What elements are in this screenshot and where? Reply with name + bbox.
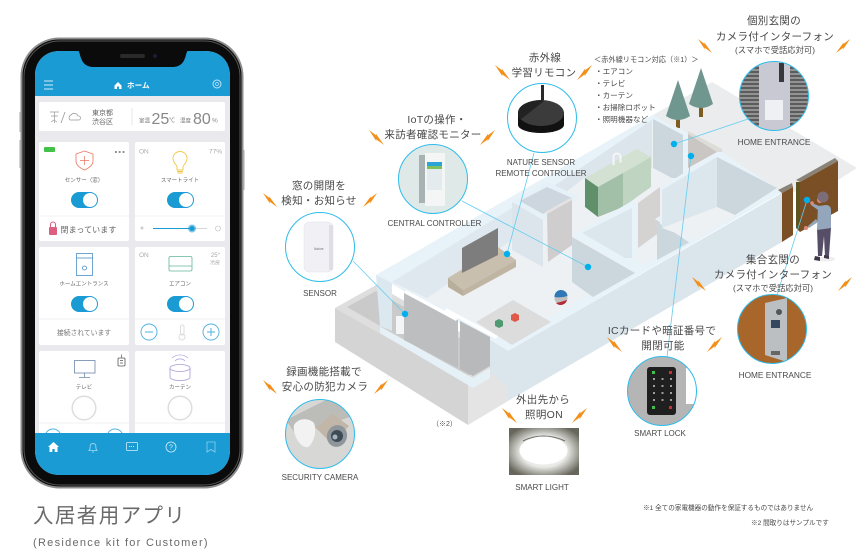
callout: smart light: 外出先から: [516, 394, 570, 406]
card: smart light: [135, 142, 225, 241]
weather card: 25: [152, 111, 169, 128]
tab bar: [35, 433, 230, 475]
callout: smart light: 照明ON: [525, 409, 563, 421]
card: air conditioner: ON: [139, 252, 149, 259]
callout: shared entrance intercom: カメラ付インターフォン: [714, 268, 832, 281]
window panels: [404, 290, 508, 387]
callout: individual entrance intercom: 個別玄関の: [747, 14, 801, 27]
callout: smart lock: SMART LOCK: [634, 429, 687, 438]
app header: [35, 51, 230, 96]
card: air conditioner: 25°: [211, 253, 221, 259]
weather card: %: [212, 118, 218, 124]
callout: window sensor: 窓の開閉を: [292, 180, 346, 192]
IR compatible device list: ・エアコン: [595, 67, 633, 76]
IR compatible device list: ＜赤外線リモコン対応（※1）＞: [594, 55, 699, 64]
callout: central controller: CENTRAL CONTROLLER: [388, 219, 482, 228]
kitchen counter: [585, 149, 651, 217]
callout: central controller: [369, 113, 495, 228]
card: air conditioner: [135, 247, 225, 345]
weather card: 室温: [139, 116, 151, 124]
card: smart light: スマートライト: [161, 177, 199, 184]
callout: individual entrance intercom: [698, 14, 850, 147]
weather card: 渋谷区: [92, 117, 113, 126]
callout: smart light: SMART LIGHT: [515, 483, 569, 492]
callout: smart lock: 開閉可能: [641, 339, 685, 352]
callout: IR remote: 赤外線: [529, 51, 561, 64]
callout: security camera: 安心の防犯カメラ: [282, 380, 368, 393]
IR compatible device list: ・テレビ: [595, 79, 625, 88]
callout: window sensor: [263, 180, 377, 298]
weather card: 80: [193, 111, 211, 128]
back wall: [392, 208, 512, 298]
IR compatible device list: ・カーテン: [595, 91, 633, 100]
card: sensor: 閉まっています: [60, 226, 116, 234]
callout: IR remote: REMOTE CONTROLLER: [495, 169, 587, 178]
callout: IR remote: 学習リモコン: [512, 66, 576, 79]
left pillar: [376, 275, 490, 388]
IR compatible device list: [594, 55, 699, 124]
upper room: [653, 119, 722, 178]
ball: [554, 290, 568, 305]
TV stand: [448, 247, 516, 296]
callout: shared entrance intercom: (スマホで受話応対可): [733, 283, 813, 293]
weather card: 東京都: [92, 108, 113, 117]
card: TV: [39, 351, 129, 433]
footnotes: ※1 全ての家電機器の動作を保証するものではありません: [643, 503, 814, 512]
callout: individual entrance intercom: HOME ENTRANCE: [738, 137, 811, 147]
card: home entrance: [39, 247, 129, 345]
callout: shared entrance intercom: 集合玄関の: [746, 253, 800, 266]
card: curtain: [135, 351, 225, 441]
card: home entrance: ホームエントランス: [59, 280, 109, 288]
IR compatible device list: ・お掃除ロボット: [595, 102, 656, 112]
connector lines and dots: [353, 119, 810, 357]
card: home entrance: 接続されています: [57, 328, 111, 337]
central room: [512, 182, 580, 267]
card: smart light: 77%: [209, 148, 222, 156]
app title: 入居者用アプリ: [33, 504, 186, 528]
TV: [462, 228, 498, 273]
card: smart light: ON: [139, 148, 149, 156]
weather card: 湿度: [180, 116, 192, 124]
callout: security camera: SECURITY CAMERA: [282, 473, 359, 482]
weather card: [39, 102, 225, 131]
isometric floor plan: [335, 68, 857, 425]
card: air conditioner: 冷房: [210, 260, 220, 266]
lower rooms: [572, 187, 696, 297]
footnote marker: （※2）: [432, 420, 457, 428]
phone screen: [35, 51, 230, 475]
notch: [78, 50, 188, 67]
balcony: [335, 285, 508, 425]
entrance gate: [778, 158, 838, 242]
callout: smart light: [502, 394, 587, 492]
footnotes: [643, 503, 829, 527]
card: sensor: センサー（窓）: [65, 176, 103, 184]
floor rug with blocks: [476, 300, 551, 345]
IR compatible device list: ・照明機器など: [595, 114, 649, 124]
large room: [660, 152, 782, 240]
callout: individual entrance intercom: (スマホで受話応対可): [735, 45, 815, 55]
footnotes: ※2 間取りはサンプルです: [751, 519, 829, 527]
phone: resident app: [20, 38, 244, 488]
callout: security camera: 録画機能搭載で: [286, 365, 362, 378]
callout: security camera: [263, 365, 388, 482]
card: air conditioner: エアコン: [169, 280, 191, 288]
callout: window sensor: 検知・お知らせ: [281, 194, 357, 207]
callout: shared entrance intercom: HOME ENTRANCE: [739, 370, 812, 380]
app subtitle: (Residence kit for Customer): [33, 537, 209, 549]
callout: central controller: IoTの操作・: [407, 113, 467, 126]
app header: ホーム: [127, 81, 150, 90]
callout: central controller: 来訪者確認モニター: [384, 128, 482, 141]
callout: window sensor: SENSOR: [303, 289, 337, 298]
person: [804, 192, 835, 262]
callout: individual entrance intercom: カメラ付インターフォン: [716, 30, 834, 43]
phone body: [22, 38, 242, 488]
callout: IR remote: NATURE SENSOR: [507, 158, 575, 167]
card: TV: テレビ: [76, 383, 93, 391]
app title: [33, 504, 209, 549]
callout: window sensor: Nature: [314, 247, 324, 251]
ground plane: [653, 82, 857, 195]
trees: [666, 68, 713, 128]
callout: shared entrance intercom: [692, 253, 852, 380]
callout: smart lock: ICカードや暗証番号で: [608, 325, 716, 337]
house slab and exterior wall: [376, 115, 782, 401]
weather card: ℃: [169, 118, 175, 124]
card: curtain: カーテン: [169, 384, 191, 391]
callout: IR remote: [495, 51, 592, 178]
tab bar: ?: [169, 444, 173, 452]
card: sensor: [39, 142, 129, 241]
callout: smart lock: [607, 325, 722, 438]
